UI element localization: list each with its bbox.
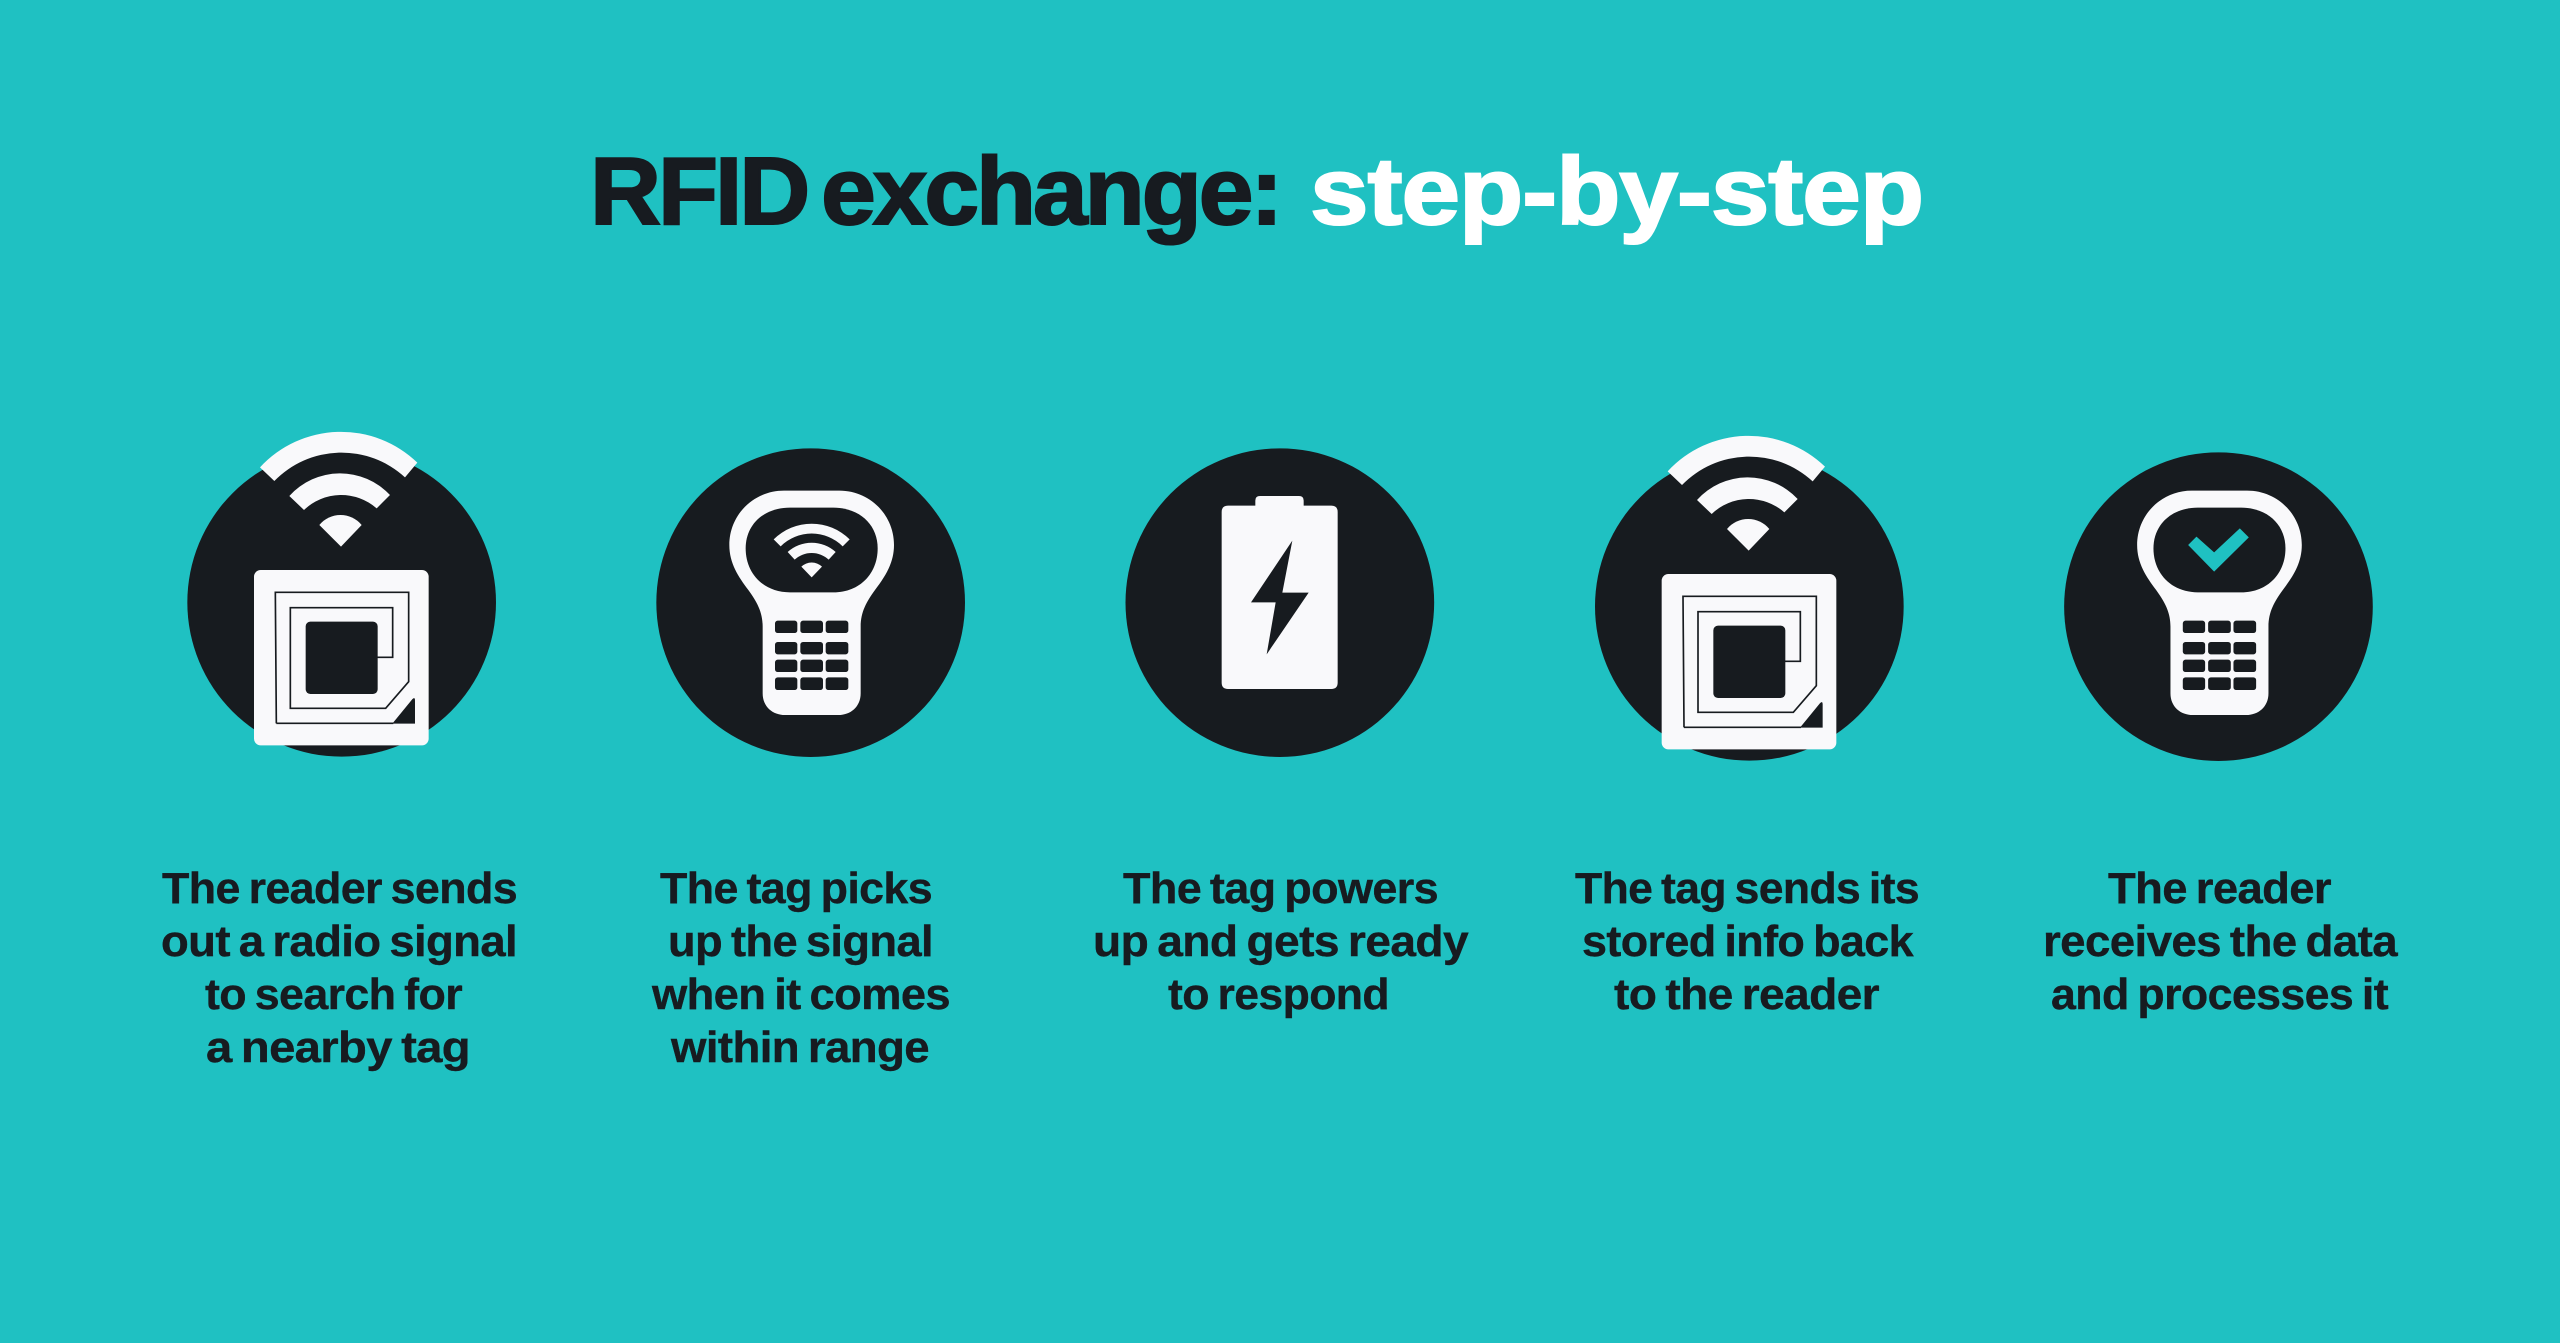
step 3 description xyxy=(1093,864,1469,1019)
step 2 description xyxy=(651,864,950,1072)
step 1 description xyxy=(161,864,517,1072)
step 4 description xyxy=(1575,864,1919,1019)
step 4 description: The tag sends its xyxy=(1575,864,1919,913)
step 1: reader sends signal xyxy=(161,432,517,1072)
step 4 description: stored info back xyxy=(1582,917,1914,966)
step 1 description: to search for xyxy=(205,970,462,1019)
icon: wifi tag on dark circle xyxy=(1595,436,1904,761)
step 2: tag picks up signal xyxy=(651,448,965,1072)
step 5 description: The reader xyxy=(2108,864,2331,913)
icon: wifi tag on dark circle xyxy=(187,432,496,757)
step 2 description: up the signal xyxy=(668,917,933,966)
step 4 description: to the reader xyxy=(1614,970,1879,1019)
step 3 description: to respond xyxy=(1168,970,1389,1019)
step 2 description: The tag picks xyxy=(660,864,932,913)
step 3 description: up and gets ready xyxy=(1093,917,1469,966)
step 5: reader receives data xyxy=(2043,452,2398,1019)
icon: battery with lightning bolt xyxy=(1125,448,1434,757)
title white part: step-by-step xyxy=(1310,138,1923,245)
step 5 description: and processes it xyxy=(2051,970,2389,1019)
icon: handheld reader with check mark xyxy=(2064,452,2373,761)
step 5 description: receives the data xyxy=(2043,917,2398,966)
step 5 description xyxy=(2043,864,2398,1019)
title dark part: RFID exchange: xyxy=(590,138,1280,245)
step 2 description: when it comes xyxy=(651,970,950,1019)
step 3 description: The tag powers xyxy=(1123,864,1438,913)
icon: handheld reader with wifi xyxy=(656,448,965,757)
step 1 description: a nearby tag xyxy=(206,1023,470,1072)
title xyxy=(590,138,1923,245)
step 3: tag powers up xyxy=(1093,448,1469,1019)
step 1 description: out a radio signal xyxy=(161,917,517,966)
step 2 description: within range xyxy=(670,1023,929,1072)
step 1 description: The reader sends xyxy=(162,864,517,913)
step 4: tag sends info back xyxy=(1575,436,1919,1019)
